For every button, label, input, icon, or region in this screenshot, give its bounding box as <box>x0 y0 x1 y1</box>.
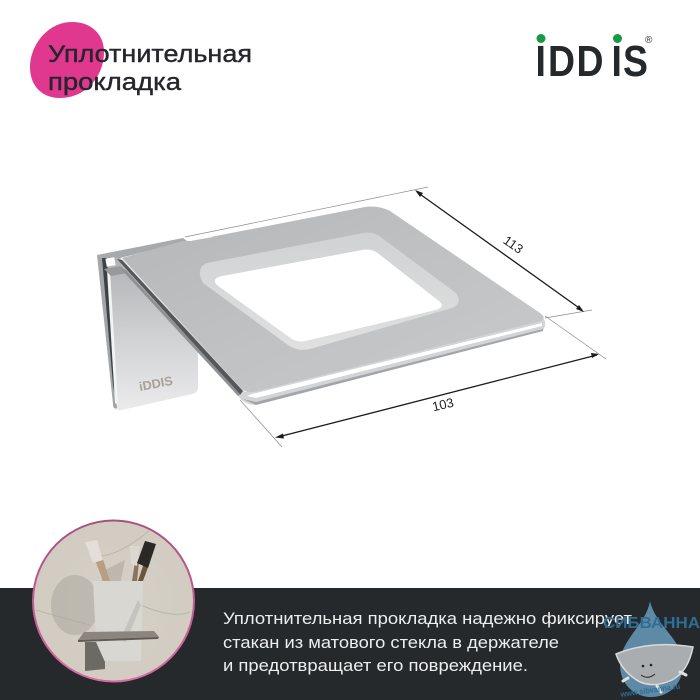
opening <box>215 250 442 342</box>
dimension: 113 <box>185 187 592 318</box>
plate edge <box>117 259 545 405</box>
pink blob behind heading <box>30 22 104 98</box>
dimension: 113: 113 <box>500 233 526 257</box>
photo circle: tumbler in holder <box>30 518 200 688</box>
white gap behind plate <box>185 237 213 241</box>
gasket ring <box>200 233 459 350</box>
title: Уплотнительная <box>48 41 252 68</box>
toothbrushes <box>96 550 110 581</box>
product: wall holder with plate <box>97 206 545 410</box>
brand mark on bracket: iDDIS <box>138 374 174 394</box>
description text: стакан из матового стекла в держателе <box>223 633 559 652</box>
watermark: bathtub in water drop <box>603 601 700 699</box>
title: прокладка <box>48 69 182 96</box>
dimension: 103: 103 <box>431 395 455 414</box>
dark bottom band <box>0 588 700 700</box>
logo: IDDIS: IDDIS <box>536 36 648 86</box>
frosted tumbler <box>93 581 143 661</box>
description text: Уплотнительная прокладка надежно фиксирует <box>223 609 632 628</box>
shelf and bracket <box>78 631 159 640</box>
description text: и предотвращает его повреждение. <box>223 656 528 675</box>
dimension: 103 <box>240 316 606 447</box>
description text <box>223 609 632 675</box>
watermark: bathtub in water drop: www.sibvanna.ru <box>619 682 681 699</box>
wall bracket <box>97 238 198 410</box>
title <box>48 41 252 96</box>
plate top <box>122 206 544 392</box>
watermark: bathtub in water drop: СИБВАННА <box>603 615 700 632</box>
logo: IDDIS: ® <box>645 35 653 46</box>
